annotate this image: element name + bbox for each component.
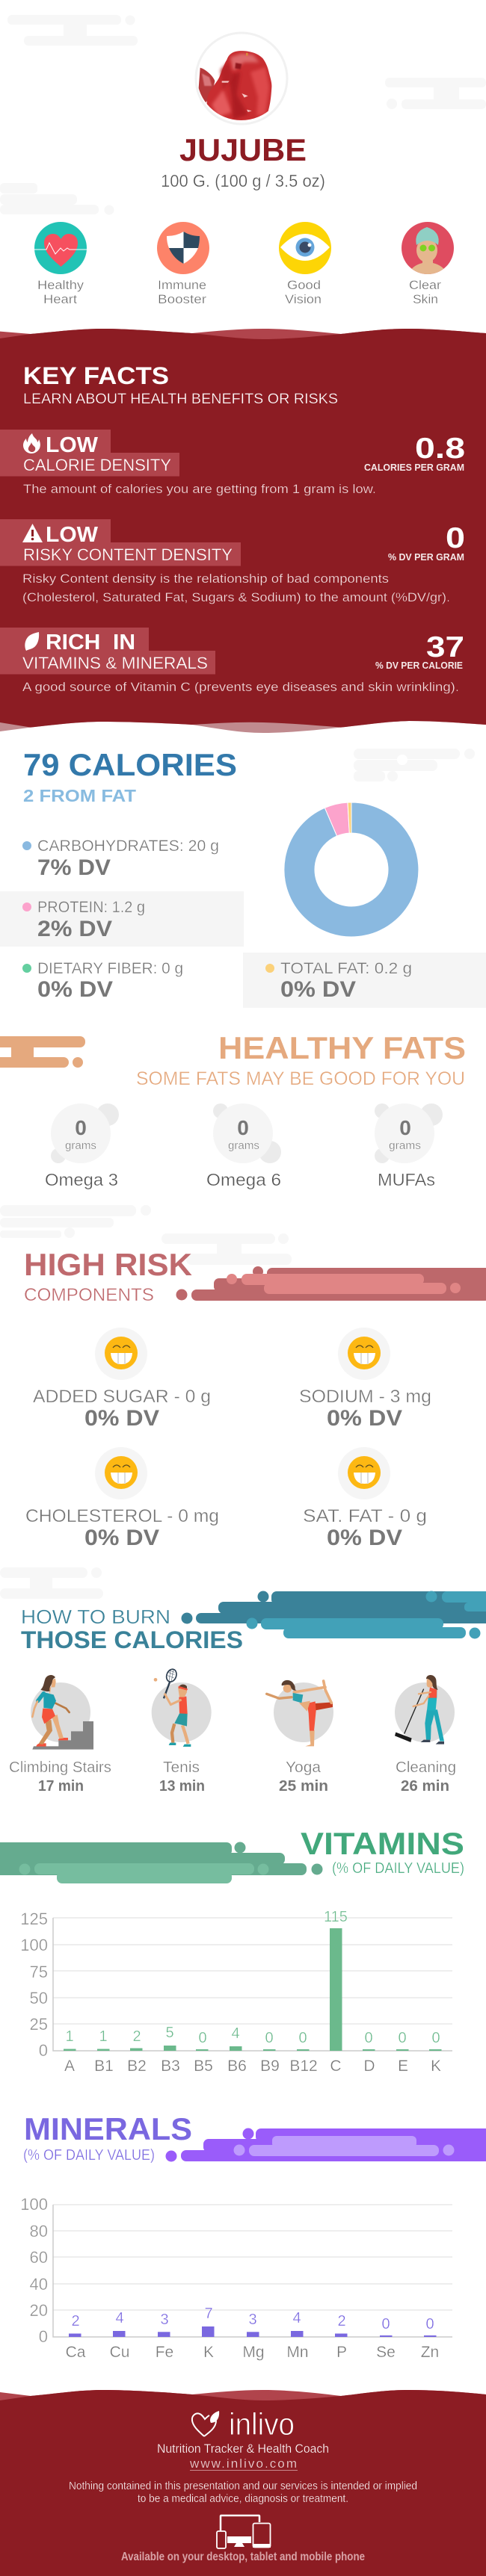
activity: climbing stairs — [9, 1675, 111, 1795]
decoration: teal bars — [181, 1591, 486, 1639]
availability note: Available on your desktop, tablet and mobile phone — [121, 2551, 365, 2563]
icon: good vision: Vision — [285, 292, 322, 306]
bar chart: vitamins: 25 — [30, 2015, 48, 2034]
bar chart: vitamins: K — [431, 2058, 441, 2075]
activity: yoga: Yoga — [286, 1759, 322, 1776]
legend: carbohydrates: 7% DV — [37, 855, 111, 880]
panel: burn calories — [9, 1591, 486, 1795]
healthy fats heading: HEALTHY FATS — [218, 1030, 466, 1065]
key facts subheading: LEARN ABOUT HEALTH BENEFITS OR RISKS — [23, 391, 338, 407]
risk: added sugar: ADDED SUGAR - 0 g — [33, 1387, 211, 1407]
bar chart: vitamins: B1 — [94, 2058, 114, 2075]
legend: total fat: 0% DV — [280, 977, 356, 1002]
fact: calorie density: CALORIE DENSITY — [23, 456, 171, 474]
bar chart: vitamins: 125 — [20, 1910, 48, 1928]
bar chart: vitamins: 0 — [398, 2030, 407, 2046]
bar chart: vitamins: A — [64, 2058, 75, 2075]
header: jujube photo — [196, 33, 287, 124]
bar chart: minerals: 2 — [71, 2313, 80, 2329]
disclaimer: Nothing contained in this presentation and our services is intended or implied — [69, 2480, 417, 2492]
bar chart: vitamins: C — [330, 2058, 342, 2075]
decoration: red bars — [176, 1266, 486, 1301]
bar chart: minerals: P — [336, 2344, 347, 2361]
key facts heading: KEY FACTS — [23, 362, 169, 389]
icon: good vision — [279, 222, 331, 306]
bar chart: minerals: K — [203, 2344, 214, 2361]
bar chart: vitamins: 2 — [132, 2028, 141, 2045]
vitamins heading: VITAMINS — [301, 1826, 464, 1861]
fat: omega 6 — [206, 1103, 281, 1189]
bar chart: vitamins: 100 — [20, 1936, 48, 1954]
bar chart: minerals: 4 — [292, 2310, 301, 2326]
bar chart: vitamins: B5 — [194, 2058, 213, 2075]
bar chart: minerals: 2 — [337, 2313, 346, 2329]
bar chart: minerals: 0 — [381, 2316, 390, 2332]
bar chart: minerals — [20, 2195, 452, 2361]
serving size: 100 G. (100 g / 3.5 oz) — [161, 171, 325, 191]
bar chart: minerals: 80 — [30, 2222, 48, 2241]
risk: saturated fat: 0% DV — [327, 1526, 402, 1550]
decoration: purple bars — [166, 2128, 486, 2162]
legend: dietary fiber: 0% DV — [37, 977, 113, 1002]
panel: healthy fats — [0, 1030, 466, 1189]
activity: cleaning: Cleaning — [396, 1759, 456, 1776]
fat: omega 6: grams — [228, 1139, 259, 1152]
bar chart: vitamins: 0 — [198, 2030, 207, 2046]
panel: key facts — [0, 329, 486, 733]
bar chart: minerals: Mn — [286, 2344, 309, 2361]
icon: immune booster — [157, 222, 209, 306]
fat: omega 3: grams — [65, 1139, 96, 1152]
fact: calorie density: The amount of calories you are getting from 1 gram is low. — [23, 482, 376, 496]
legend: protein: 2% DV — [37, 917, 112, 941]
bar chart: minerals: 40 — [30, 2275, 48, 2294]
risk: cholesterol: 0% DV — [84, 1526, 159, 1550]
icon: healthy heart: Heart — [43, 292, 77, 306]
icon: clear skin: Skin — [413, 292, 438, 306]
bar chart: minerals: Mg — [242, 2344, 265, 2361]
activity: yoga — [267, 1680, 333, 1795]
icon: good vision: Good — [287, 278, 321, 292]
activity: climbing stairs: Climbing Stairs — [9, 1759, 111, 1776]
bar chart: vitamins: B12 — [289, 2058, 318, 2075]
bar chart: minerals: 4 — [115, 2310, 124, 2326]
donut chart — [284, 802, 419, 937]
activity: climbing stairs: 17 min — [38, 1778, 84, 1795]
minerals heading: MINERALS — [24, 2111, 192, 2146]
bar chart: minerals: 100 — [20, 2195, 48, 2214]
bar chart: vitamins: 4 — [231, 2025, 240, 2042]
bar chart: vitamins: 115 — [324, 1909, 348, 1925]
website link: www.inlivo.com — [189, 2456, 297, 2471]
legend: total fat — [265, 960, 412, 1002]
fact: risky content density: RISKY CONTENT DENSITY — [23, 545, 233, 564]
bar chart: vitamins: 75 — [30, 1963, 48, 1981]
fact: calorie density: 0.8 — [415, 433, 465, 465]
icon: devices — [217, 2515, 271, 2548]
bar chart: vitamins — [20, 1909, 452, 2075]
disclaimer: to be a medical advice, diagnosis or treatment. — [138, 2492, 348, 2505]
legend: protein — [22, 899, 145, 941]
inlivo logo — [192, 2406, 295, 2442]
legend: carbohydrates: CARBOHYDRATES: 20 g — [37, 837, 219, 855]
risk: sodium — [299, 1328, 431, 1431]
icon: immune booster: Immune — [158, 278, 206, 292]
legend: carbohydrates — [22, 837, 219, 880]
fat: mufas: grams — [389, 1139, 421, 1152]
legend: total fat: TOTAL FAT: 0.2 g — [280, 960, 412, 977]
bar chart: minerals: 20 — [30, 2301, 48, 2320]
icon: healthy heart: Healthy — [37, 278, 84, 292]
risk: cholesterol: CHOLESTEROL - 0 mg — [25, 1506, 219, 1526]
legend: dietary fiber — [22, 960, 183, 1002]
activity: cleaning: 26 min — [401, 1778, 449, 1795]
icon: clear skin — [402, 222, 454, 306]
fact: risky content density — [0, 519, 465, 604]
risk: saturated fat: SAT. FAT - 0 g — [303, 1506, 427, 1526]
bar chart: minerals: Zn — [421, 2344, 439, 2361]
bar chart: vitamins: 0 — [364, 2030, 373, 2046]
icon: healthy heart — [34, 222, 87, 306]
fact: risky content density: LOW — [46, 523, 99, 547]
components subheading: COMPONENTS — [24, 1285, 154, 1305]
title: JUJUBE — [179, 132, 307, 167]
calories from fat: 2 FROM FAT — [23, 786, 136, 805]
panel: calories — [0, 747, 486, 1008]
activity: tennis: 13 min — [159, 1778, 205, 1795]
calories heading: 79 CALORIES — [23, 747, 237, 782]
tagline: Nutrition Tracker & Health Coach — [157, 2442, 329, 2456]
risk: sodium: 0% DV — [327, 1406, 402, 1431]
bar chart: vitamins: B3 — [161, 2058, 180, 2075]
fat: mufas: MUFAs — [378, 1170, 435, 1189]
risk: added sugar: 0% DV — [84, 1406, 159, 1431]
risk: sodium: SODIUM - 3 mg — [299, 1387, 431, 1407]
bar chart: minerals: 0 — [39, 2327, 48, 2346]
decoration: green bars — [0, 1842, 323, 1883]
decoration: peach bars — [0, 1036, 85, 1068]
fact: risky content density: 0 — [446, 522, 465, 554]
activity: cleaning — [395, 1675, 456, 1795]
bar chart: vitamins: 5 — [165, 2025, 174, 2041]
bar chart: minerals: Fe — [156, 2344, 173, 2361]
icon: clear skin: Clear — [409, 278, 441, 292]
activity: tennis — [152, 1668, 212, 1795]
fact: risky content density: Risky Content density is the relationship of bad components — [22, 572, 389, 586]
fact: rich in vitamins and minerals: % DV PER CALORIE — [375, 660, 463, 671]
vitamins subheading: (% OF DAILY VALUE) — [332, 1860, 464, 1877]
burn heading light: HOW TO BURN — [21, 1606, 170, 1628]
activity: yoga: 25 min — [279, 1778, 328, 1795]
bar chart: minerals: 60 — [30, 2248, 48, 2267]
bar chart: vitamins: 1 — [99, 2028, 108, 2045]
panel: high risk components — [24, 1247, 486, 1550]
activity: tennis: Tenis — [163, 1759, 200, 1776]
bar chart: vitamins: B9 — [260, 2058, 280, 2075]
legend: protein: PROTEIN: 1.2 g — [37, 899, 145, 916]
bar chart: minerals: Ca — [66, 2344, 86, 2361]
fat: omega 6: 0 — [237, 1116, 249, 1139]
bar chart: vitamins: 1 — [65, 2028, 74, 2045]
fact: calorie density: CALORIES PER GRAM — [364, 462, 464, 473]
bar chart: minerals: 3 — [248, 2312, 257, 2328]
fat: omega 3 — [45, 1103, 119, 1189]
fact: calorie density — [0, 430, 465, 496]
bar chart: vitamins: 0 — [431, 2030, 440, 2046]
legend: dietary fiber: DIETARY FIBER: 0 g — [37, 960, 183, 977]
fat: omega 3: Omega 3 — [45, 1170, 118, 1189]
high risk heading: HIGH RISK — [24, 1247, 192, 1282]
burn heading bold: THOSE CALORIES — [21, 1626, 243, 1653]
bar chart: vitamins: 50 — [30, 1989, 48, 2007]
risk: added sugar — [33, 1328, 211, 1431]
healthy fats subheading: SOME FATS MAY BE GOOD FOR YOU — [136, 1068, 465, 1089]
inlivo logo: inlivo — [229, 2406, 295, 2442]
fact: rich in vitamins and minerals: 37 — [426, 631, 464, 663]
bar chart: vitamins: 0 — [39, 2041, 48, 2060]
bar chart: vitamins: B6 — [227, 2058, 247, 2075]
risk: cholesterol — [25, 1447, 219, 1550]
footer — [0, 2390, 486, 2576]
bar chart: minerals: 0 — [425, 2316, 434, 2332]
fact: risky content density: (Cholesterol, Saturated Fat, Sugars & Sodium) to the amount (%DV/gr). — [22, 590, 450, 604]
fact: risky content density: % DV PER GRAM — [388, 551, 464, 563]
disclaimer — [69, 2480, 417, 2505]
fact: calorie density: LOW — [46, 433, 99, 457]
fat: omega 3: 0 — [75, 1116, 87, 1139]
bar chart: vitamins: B2 — [127, 2058, 147, 2075]
risk: saturated fat — [303, 1447, 427, 1550]
icon: immune booster: Booster — [158, 292, 206, 306]
bar chart: vitamins: 0 — [298, 2030, 307, 2046]
panel: vitamins — [0, 1826, 464, 2075]
fact: rich in vitamins and minerals: RICH IN — [46, 631, 135, 654]
fat: mufas: 0 — [399, 1116, 411, 1139]
bar chart: vitamins: 0 — [265, 2030, 274, 2046]
panel: minerals — [20, 2111, 486, 2361]
bar chart: minerals: Cu — [110, 2344, 129, 2361]
bar chart: minerals: 7 — [204, 2306, 213, 2322]
fact: rich in vitamins and minerals — [0, 628, 464, 694]
fat: omega 6: Omega 6 — [206, 1170, 281, 1189]
bar chart: vitamins: E — [398, 2058, 408, 2075]
fact: rich in vitamins and minerals: A good source of Vitamin C (prevents eye diseases and skin wrinkling). — [22, 680, 459, 694]
fact: rich in vitamins and minerals: VITAMINS & MINERALS — [22, 654, 208, 672]
bar chart: vitamins: D — [363, 2058, 375, 2075]
bar chart: minerals: Se — [376, 2344, 396, 2361]
fat: mufas — [375, 1103, 443, 1189]
minerals subheading: (% OF DAILY VALUE) — [23, 2147, 155, 2164]
bar chart: minerals: 3 — [160, 2312, 169, 2328]
